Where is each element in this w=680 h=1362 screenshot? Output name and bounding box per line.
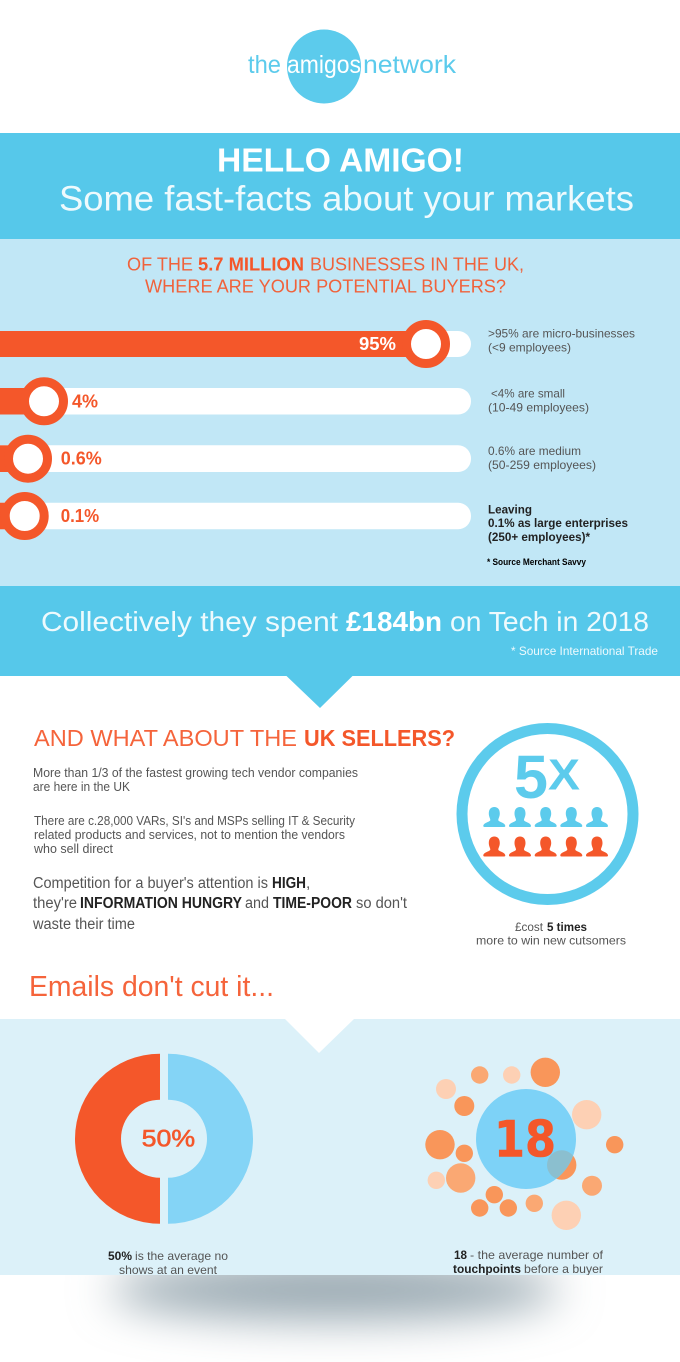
text: competition: HIGH bbox=[272, 875, 306, 892]
caption: no shows: 50% bbox=[108, 1249, 132, 1263]
text: VARs and MSPs: who sell direct bbox=[33, 842, 114, 856]
5x figure: 5 bbox=[514, 743, 548, 811]
text: competition: and bbox=[245, 895, 269, 912]
title: HELLO AMIGO! bbox=[217, 142, 464, 178]
text: competition: so don't bbox=[356, 895, 408, 912]
header band bbox=[0, 133, 680, 239]
tech spend headline bbox=[41, 606, 649, 637]
buyers heading: BUSINESSES IN THE UK, bbox=[310, 254, 524, 274]
label: large enterprises bbox=[488, 502, 628, 544]
caption: cost 5 times: more to win new cutsomers bbox=[476, 934, 626, 948]
sellers heading bbox=[34, 725, 455, 751]
text: competition: , bbox=[306, 875, 310, 892]
source note: * Source Merchant Savvy bbox=[487, 557, 587, 568]
caption: touchpoints bbox=[453, 1250, 603, 1275]
subtitle: Some fast-facts about your markets bbox=[59, 180, 634, 218]
label: large enterprises: Leaving bbox=[488, 502, 532, 516]
bar: 95% micro-businesses: 95% bbox=[359, 334, 396, 354]
caption: cost 5 times: £cost bbox=[515, 920, 544, 934]
bar: 4% small bbox=[0, 382, 471, 421]
5x figure bbox=[514, 743, 580, 811]
logo: the bbox=[248, 51, 281, 79]
text: competition: Competition for a buyer's attention is bbox=[33, 875, 268, 892]
text: competition: TIME-POOR bbox=[273, 895, 352, 912]
5x figure: X bbox=[548, 750, 580, 799]
bubbles bbox=[425, 1058, 623, 1230]
label: micro-businesses: (<9 employees) bbox=[488, 341, 571, 355]
source note: * Source International Trade bbox=[511, 644, 658, 658]
text: fastest growing vendors bbox=[33, 766, 358, 794]
touchpoints bubble chart: 18 bbox=[494, 1110, 556, 1168]
label: micro-businesses bbox=[488, 327, 635, 355]
buyers heading: WHERE ARE YOUR POTENTIAL BUYERS? bbox=[145, 276, 506, 296]
icon: blue people row bbox=[483, 807, 608, 827]
logo: amigos bbox=[287, 51, 361, 79]
text: VARs and MSPs: There are c.28,000 VARs, SI's and MSPs selling IT & Security bbox=[34, 814, 356, 828]
caption: no shows: is the average no bbox=[135, 1249, 228, 1263]
label: small bbox=[488, 387, 589, 415]
label: medium: 0.6% are medium bbox=[488, 444, 581, 458]
tech spend headline: £184bn bbox=[346, 606, 442, 637]
donut chart bbox=[75, 1054, 253, 1224]
drop shadow bbox=[110, 1260, 560, 1320]
bar: 0.1% large bbox=[0, 496, 471, 536]
bar: 95% micro-businesses bbox=[0, 324, 471, 364]
label: large enterprises: (250+ employees)* bbox=[488, 530, 590, 544]
logo: network bbox=[363, 51, 457, 79]
text: competition: waste their time bbox=[32, 916, 135, 933]
text: competition bbox=[32, 875, 408, 933]
logo bbox=[248, 30, 457, 104]
label: small: (10-49 employees) bbox=[488, 401, 589, 415]
panel: tech spend band with arrow bbox=[0, 586, 680, 708]
text: VARs and MSPs: related products and services, not to mention the vendors bbox=[34, 828, 345, 842]
caption: no shows: shows at an event bbox=[119, 1263, 218, 1277]
text: competition: INFORMATION HUNGRY bbox=[80, 895, 243, 912]
sellers heading: UK SELLERS? bbox=[304, 725, 455, 751]
caption: touchpoints: 18 bbox=[454, 1248, 467, 1262]
caption: touchpoints: before a buyer bbox=[524, 1262, 603, 1276]
text: fastest growing vendors: are here in the UK bbox=[33, 780, 131, 794]
sellers heading: AND WHAT ABOUT THE bbox=[34, 725, 297, 751]
panel: potential buyers bbox=[0, 239, 680, 586]
bar: 0.6% medium: 0.6% bbox=[61, 448, 102, 468]
caption: no shows bbox=[108, 1252, 228, 1274]
bar: 0.6% medium bbox=[0, 439, 471, 478]
5x icon bbox=[462, 728, 633, 900]
text: fastest growing vendors: More than 1/3 of the fastest growing tech vendor companies bbox=[33, 766, 358, 780]
buyers heading: OF THE bbox=[127, 254, 193, 274]
label: medium: (50-259 employees) bbox=[488, 458, 596, 472]
touchpoints bubble chart bbox=[425, 1058, 623, 1230]
panel: emails band with notch bbox=[0, 1019, 680, 1275]
caption: touchpoints: - the average number of bbox=[470, 1248, 604, 1262]
caption: touchpoints: touchpoints bbox=[453, 1262, 521, 1276]
caption: cost 5 times: 5 times bbox=[547, 920, 587, 934]
label: micro-businesses: >95% are micro-businesses bbox=[488, 327, 635, 341]
text: competition: they're bbox=[33, 895, 77, 912]
label: large enterprises: 0.1% as large enterprises bbox=[488, 516, 628, 530]
buyers heading bbox=[127, 254, 524, 296]
label: medium bbox=[488, 444, 596, 472]
bar: 4% small: 4% bbox=[72, 392, 98, 412]
buyers heading: 5.7 MILLION bbox=[198, 254, 304, 274]
tech spend headline: Collectively they spent bbox=[41, 606, 338, 637]
tech spend headline: on Tech in 2018 bbox=[450, 606, 649, 637]
icon: orange people row bbox=[483, 836, 608, 856]
donut chart: 50% bbox=[142, 1126, 195, 1152]
emails heading: Emails don't cut it... bbox=[29, 971, 274, 1003]
label: small: <4% are small bbox=[491, 387, 565, 401]
text: VARs and MSPs bbox=[33, 814, 356, 856]
caption: cost 5 times bbox=[476, 920, 626, 948]
bar: 0.1% large: 0.1% bbox=[61, 506, 99, 526]
